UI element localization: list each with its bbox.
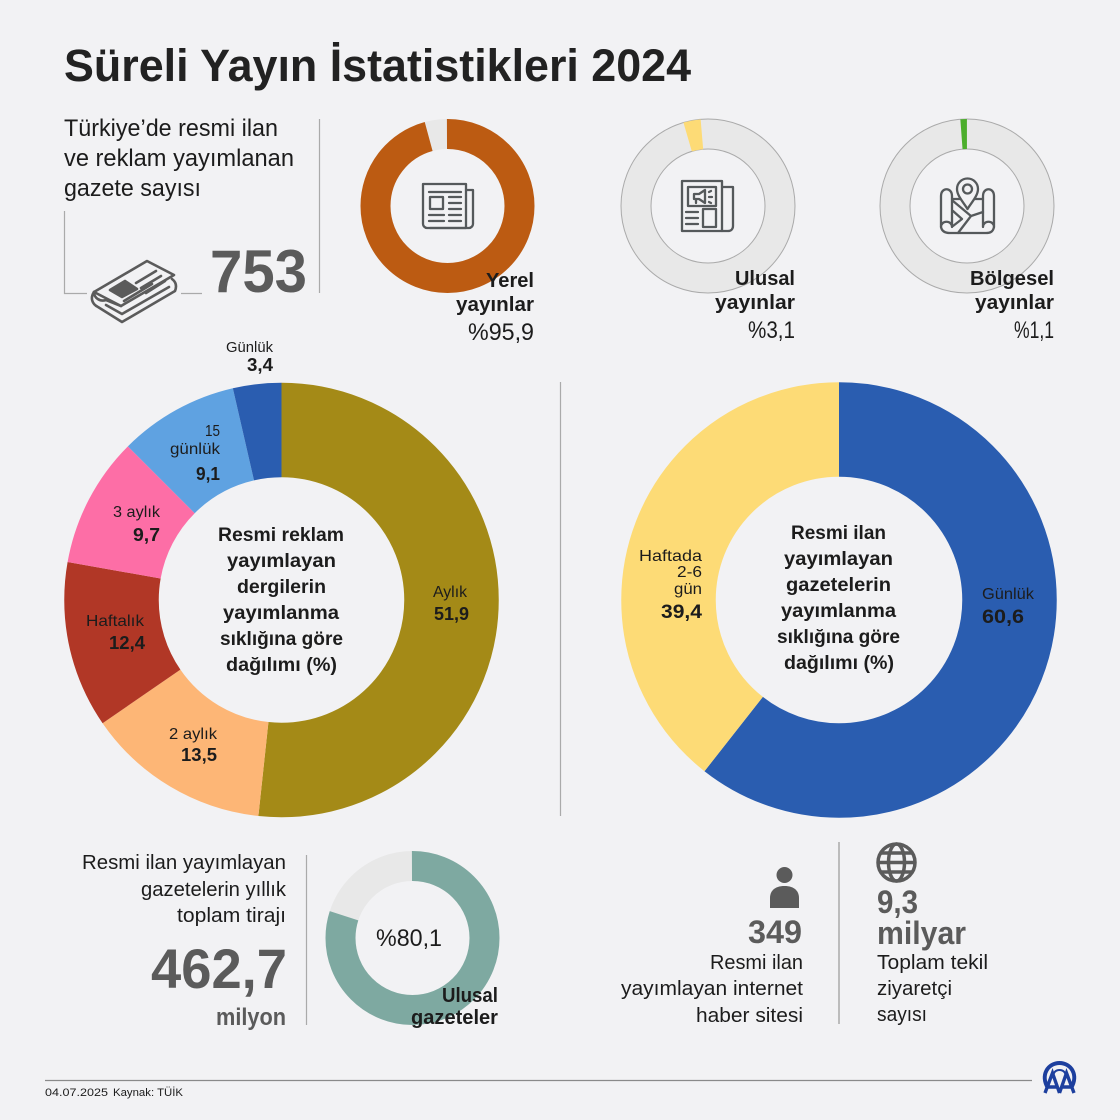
donut: ulusal gazeteler xyxy=(340,866,484,1010)
label: Bölgesel yayınlar: Bölgesel xyxy=(970,268,1054,290)
text block: dergiler chart title: sıklığına göre xyxy=(220,629,343,650)
labels: dergiler slices: Aylık xyxy=(433,584,468,601)
text block: dergiler chart title xyxy=(218,525,344,676)
text block: circulation description: Resmi ilan yayımlayan xyxy=(82,852,286,874)
labels: gazeteler slices: 39,4 xyxy=(661,602,702,623)
number: 462,7 milyon: milyon xyxy=(216,1004,286,1031)
number: 9,3 milyar xyxy=(877,884,966,951)
text block: newspaper count description xyxy=(64,115,294,202)
label: Bölgesel yayınlar xyxy=(970,268,1054,344)
labels: dergiler slices: 51,9 xyxy=(434,604,469,624)
label: Ulusal gazeteler: Ulusal xyxy=(442,985,498,1007)
text block: circulation description: toplam tirajı xyxy=(177,905,286,927)
labels: dergiler slices: 15 xyxy=(205,423,220,440)
labels: gazeteler slices: Haftada xyxy=(639,548,702,565)
donut: Yerel yayınlar xyxy=(376,134,520,278)
label: Bölgesel yayınlar: yayınlar xyxy=(975,292,1054,314)
label: Yerel yayınlar: yayınlar xyxy=(456,294,534,316)
panel: newspaper count xyxy=(64,115,320,322)
panel: annual circulation xyxy=(82,852,498,1031)
footer: date and source: Kaynak: TÜİK xyxy=(113,1086,184,1099)
text block: visitors description xyxy=(877,952,988,1026)
donut: Ulusal yayınlar xyxy=(619,117,797,295)
text block: gazeteler chart title: dağılımı (%) xyxy=(784,653,894,674)
number: 753: 753 xyxy=(210,238,307,305)
text block: dergiler chart title: Resmi reklam xyxy=(218,525,344,546)
labels: gazeteler slices: 60,6 xyxy=(982,607,1024,628)
icon: folded newspaper xyxy=(92,261,176,322)
donut chart: dergiler xyxy=(112,430,452,770)
title: Süreli Yayın İstatistikleri 2024 xyxy=(64,40,691,91)
number: 462,7 milyon: 462,7 xyxy=(151,937,287,1000)
icon: newspaper with megaphone xyxy=(682,181,733,231)
label: Bölgesel yayınlar: %1,1 xyxy=(1014,317,1054,344)
text block: gazeteler chart title: sıklığına göre xyxy=(777,627,900,648)
text block: visitors description: sayısı xyxy=(877,1004,927,1026)
text block: gazeteler chart title: gazetelerin xyxy=(786,575,891,596)
text block: sites description: yayımlayan internet xyxy=(621,978,803,1000)
number: 349: 349 xyxy=(748,914,802,950)
text block: newspaper count description: gazete sayısı xyxy=(64,175,201,202)
donut chart: gazeteler xyxy=(668,430,1010,770)
text block: gazeteler chart title: yayımlanma xyxy=(781,601,896,622)
icon: newspaper xyxy=(423,184,473,228)
labels: dergiler slices: 2 aylık xyxy=(169,726,218,743)
text block: sites description xyxy=(621,952,803,1027)
panel: unique visitors xyxy=(877,844,988,1026)
labels: dergiler slices: Haftalık xyxy=(86,613,145,630)
number: 462,7 milyon xyxy=(151,937,287,1031)
text block: dergiler chart title: dağılımı (%) xyxy=(226,655,337,676)
icon: map with pin xyxy=(941,178,994,233)
text block: sites description: Resmi ilan xyxy=(710,952,803,974)
label: Ulusal yayınlar xyxy=(715,268,795,344)
text block: visitors description: Toplam tekil xyxy=(877,952,988,974)
label: Yerel yayınlar: %95,9 xyxy=(468,319,534,346)
labels: dergiler slices: 9,1 xyxy=(196,464,220,484)
text block: dergiler chart title: yayımlanma xyxy=(223,603,339,624)
label: Ulusal gazeteler xyxy=(411,985,498,1029)
panel: internet news sites xyxy=(621,867,803,1027)
logo: AA xyxy=(1045,1063,1074,1093)
labels: dergiler slices: Günlük xyxy=(226,339,273,356)
text block: gazeteler chart title xyxy=(777,523,900,674)
text block: sites description: haber sitesi xyxy=(696,1005,803,1027)
donut: Bölgesel yayınlar xyxy=(880,119,1054,293)
labels: dergiler slices: 12,4 xyxy=(109,633,145,653)
text block: visitors description: ziyaretçi xyxy=(877,978,952,1000)
text block: newspaper count description: ve reklam yayımlanan xyxy=(64,145,294,172)
labels: gazeteler slices xyxy=(639,548,1035,628)
text block: dergiler chart title: dergilerin xyxy=(237,577,326,598)
text block: newspaper count description: Türkiye’de resmi ilan xyxy=(64,115,278,142)
text block: dergiler chart title: yayımlayan xyxy=(227,551,336,572)
value: %80,1: %80,1 xyxy=(376,925,442,952)
text block: circulation description: gazetelerin yıllık xyxy=(141,879,287,901)
labels: dergiler slices: 13,5 xyxy=(181,745,217,765)
labels: gazeteler slices: Günlük xyxy=(982,586,1035,603)
label: Yerel yayınlar xyxy=(456,270,534,346)
footer: date and source xyxy=(45,1086,184,1099)
labels: dergiler slices: 3,4 xyxy=(247,355,273,375)
labels: gazeteler slices: 2-6 xyxy=(677,564,702,581)
labels: dergiler slices: 3 aylık xyxy=(113,504,161,521)
text block: gazeteler chart title: yayımlayan xyxy=(784,549,893,570)
labels: gazeteler slices: gün xyxy=(674,581,702,598)
labels: dergiler slices xyxy=(86,339,469,765)
icon: globe xyxy=(878,844,915,881)
label: Yerel yayınlar: Yerel xyxy=(486,270,534,292)
icon: person xyxy=(770,867,799,908)
label: Ulusal yayınlar: yayınlar xyxy=(715,292,795,314)
number: 9,3 milyar: milyar xyxy=(877,915,966,951)
number: 9,3 milyar: 9,3 xyxy=(877,884,918,920)
labels: dergiler slices: 9,7 xyxy=(133,525,160,545)
text block: gazeteler chart title: Resmi ilan xyxy=(791,523,886,544)
text block: circulation description xyxy=(82,852,287,927)
label: Ulusal yayınlar: Ulusal xyxy=(735,268,795,290)
label: Ulusal gazeteler: gazeteler xyxy=(411,1007,498,1029)
labels: dergiler slices: günlük xyxy=(170,441,221,458)
label: Ulusal yayınlar: %3,1 xyxy=(748,317,795,344)
footer: date and source: 04.07.2025 xyxy=(45,1087,108,1099)
